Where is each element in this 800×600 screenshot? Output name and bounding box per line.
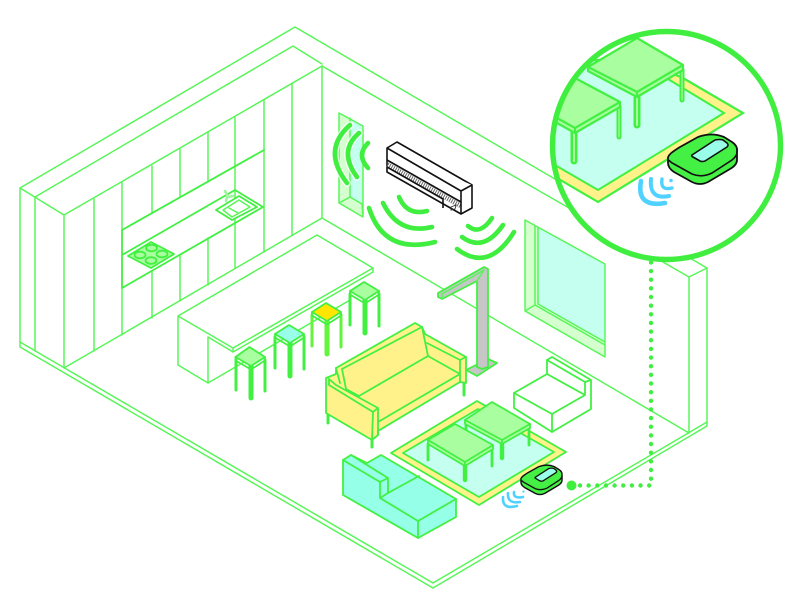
connector dotted line — [566, 262, 651, 490]
zoomed rug — [555, 58, 745, 204]
zoomed table front — [557, 78, 622, 164]
air conditioner — [387, 142, 472, 214]
stool 1 green — [236, 347, 265, 398]
small sensor signal — [503, 490, 525, 507]
magnifier circle — [550, 28, 784, 262]
magnifier ring — [552, 32, 780, 260]
large window — [525, 220, 605, 357]
cooktop — [128, 242, 174, 268]
kitchen wall cabinets — [94, 84, 292, 351]
stool 4 green — [350, 282, 379, 333]
stool 2 teal — [275, 325, 304, 376]
zoomed table back — [588, 38, 683, 125]
signal waves bottom left — [369, 197, 435, 245]
slim window — [339, 113, 363, 217]
front coffee table — [428, 424, 493, 480]
stool 3 yellow — [312, 303, 341, 354]
floor lamp — [438, 267, 497, 376]
sink — [216, 191, 257, 220]
white armchair — [514, 357, 591, 432]
zoomed signal — [640, 179, 673, 204]
rug — [391, 401, 566, 505]
kitchen island — [178, 235, 373, 383]
small sensor device — [521, 465, 562, 495]
yellow sofa — [326, 323, 466, 447]
signal waves left — [335, 125, 368, 183]
signal waves bottom right — [457, 218, 514, 258]
back coffee table — [465, 402, 530, 458]
teal sofa — [343, 455, 456, 538]
zoomed robot device — [668, 134, 737, 184]
